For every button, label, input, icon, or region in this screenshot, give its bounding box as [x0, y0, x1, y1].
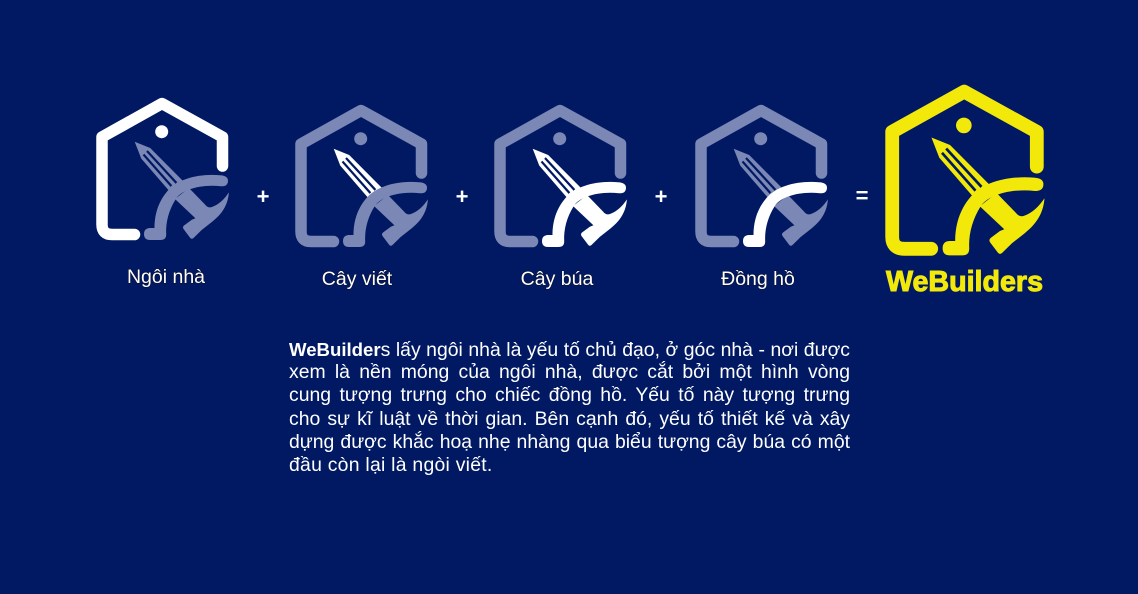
plus sign 1: + [257, 184, 269, 209]
wordmark: WeBuilders: WeBuilders [886, 266, 1043, 298]
icon: clock arc highlighted [701, 110, 828, 247]
description text block: WeBuilders lấy ngôi nhà là yếu tố chủ đạo, ở góc nhà - nơi được [289, 339, 850, 361]
icon: final yellow logo [892, 92, 1044, 255]
label: Cây búa: Cây búa [521, 268, 593, 290]
plus sign 3: + [655, 184, 667, 209]
label: Cây viết: Cây viết [322, 268, 393, 290]
label: Ngôi nhà: Ngôi nhà [127, 266, 205, 288]
description text block [289, 339, 850, 476]
label: Đồng hồ: Đồng hồ [721, 268, 795, 290]
description text block: dựng được khắc hoạ nhẹ nhàng qua biểu tượng cây búa có một [289, 431, 850, 453]
icon: house highlighted [102, 104, 229, 240]
icon: pencil highlighted [301, 110, 428, 247]
description text block: xem là nền móng của ngôi nhà, được cắt bởi một hình vòng [289, 361, 850, 383]
description text block: cho sự kĩ luật về thời gian. Bên cạnh đó, yếu tố thiết kế và xây [289, 408, 850, 430]
description text block: đầu còn lại là ngòi viết. [289, 454, 493, 476]
equals sign: = [856, 183, 868, 208]
description text block: cung tượng trưng cho chiếc đồng hồ. Yếu tố này tượng trưng [289, 384, 850, 406]
icon: hammer highlighted [500, 110, 627, 247]
plus sign 2: + [456, 184, 468, 209]
